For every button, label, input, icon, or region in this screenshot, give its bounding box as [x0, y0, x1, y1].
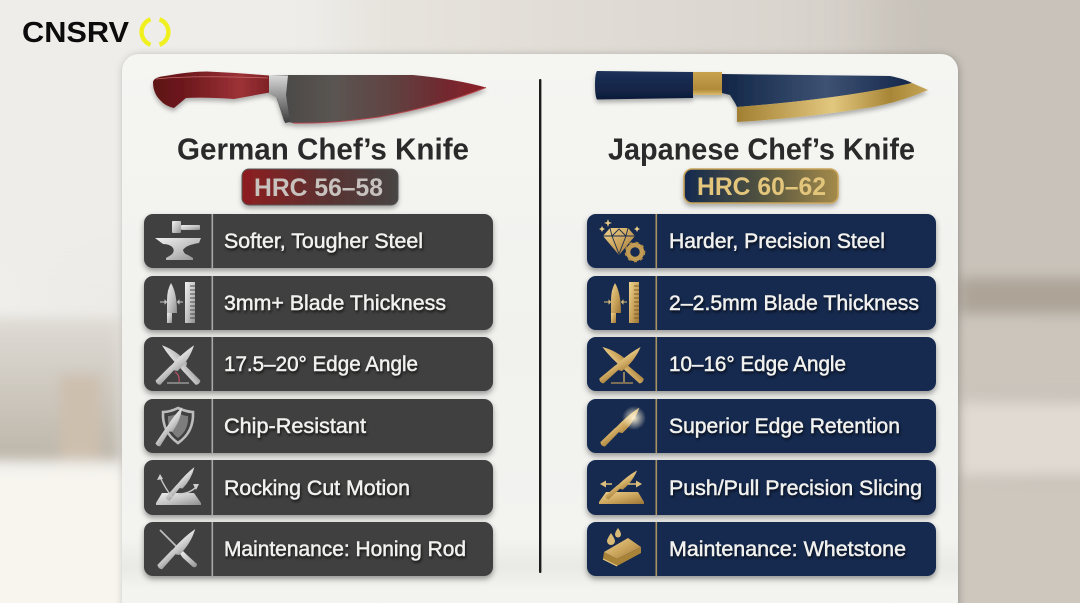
row: harder steel	[587, 214, 936, 268]
icon: Japanese knife	[595, 71, 928, 122]
row: edge retention: Superior Edge Retention	[669, 415, 900, 438]
icon: crossed knives	[155, 341, 203, 388]
badge: HRC 60-62: HRC 60–62	[697, 173, 826, 201]
heading: Japanese: Japanese Chef’s Knife	[608, 132, 915, 166]
icon: shield and knife	[155, 406, 193, 449]
icon: anvil	[155, 221, 201, 260]
row: honing rod	[144, 522, 493, 576]
center divider	[539, 79, 541, 573]
badge: HRC 56-58: HRC 56–58	[254, 174, 383, 202]
panel: comparison card	[122, 54, 958, 603]
row: edge retention	[587, 399, 936, 453]
icon: diamond and gear	[599, 219, 644, 261]
row: edge angle	[587, 337, 936, 391]
row: rocking motion: Rocking Cut Motion	[224, 477, 410, 500]
icon: knife and honing rod	[157, 527, 200, 572]
badge: HRC 60-62	[684, 169, 838, 203]
logo	[22, 17, 168, 49]
row: edge angle: 17.5–20° Edge Angle	[224, 353, 418, 376]
row: softer steel: Softer, Tougher Steel	[224, 230, 423, 253]
row: edge angle: 10–16° Edge Angle	[669, 353, 846, 376]
row: chip-resistant	[144, 399, 493, 453]
row: chip-resistant: Chip-Resistant	[224, 415, 366, 438]
icon: blade and ruler	[604, 282, 639, 323]
row: blade thickness: 2–2.5mm Blade Thickness	[669, 292, 919, 315]
row: blade thickness: 3mm+ Blade Thickness	[224, 292, 446, 315]
row: softer steel	[144, 214, 493, 268]
row: edge angle	[144, 337, 493, 391]
icon: crossed knives	[598, 342, 647, 387]
icon: knife on board with arrows	[599, 469, 644, 504]
row: honing rod: Maintenance: Honing Rod	[224, 538, 466, 561]
row: push/pull: Push/Pull Precision Slicing	[669, 477, 922, 500]
badge: HRC 56-58	[242, 169, 398, 205]
row: harder steel: Harder, Precision Steel	[669, 230, 885, 253]
icon: whetstone and drops	[603, 528, 641, 566]
row: rocking motion	[144, 460, 493, 515]
row: push/pull	[587, 460, 936, 515]
logo: CNSRV	[22, 17, 129, 49]
row: whetstone	[587, 522, 936, 576]
icon: rocking knife on board	[156, 465, 201, 505]
icon: blade and ruler	[160, 282, 195, 323]
icon: German knife	[153, 72, 486, 123]
row: whetstone: Maintenance: Whetstone	[669, 538, 906, 561]
heading: German: German Chef’s Knife	[177, 132, 469, 166]
row: blade thickness	[587, 276, 936, 330]
row: blade thickness	[144, 276, 493, 330]
icon: gleaming knife	[599, 405, 646, 450]
